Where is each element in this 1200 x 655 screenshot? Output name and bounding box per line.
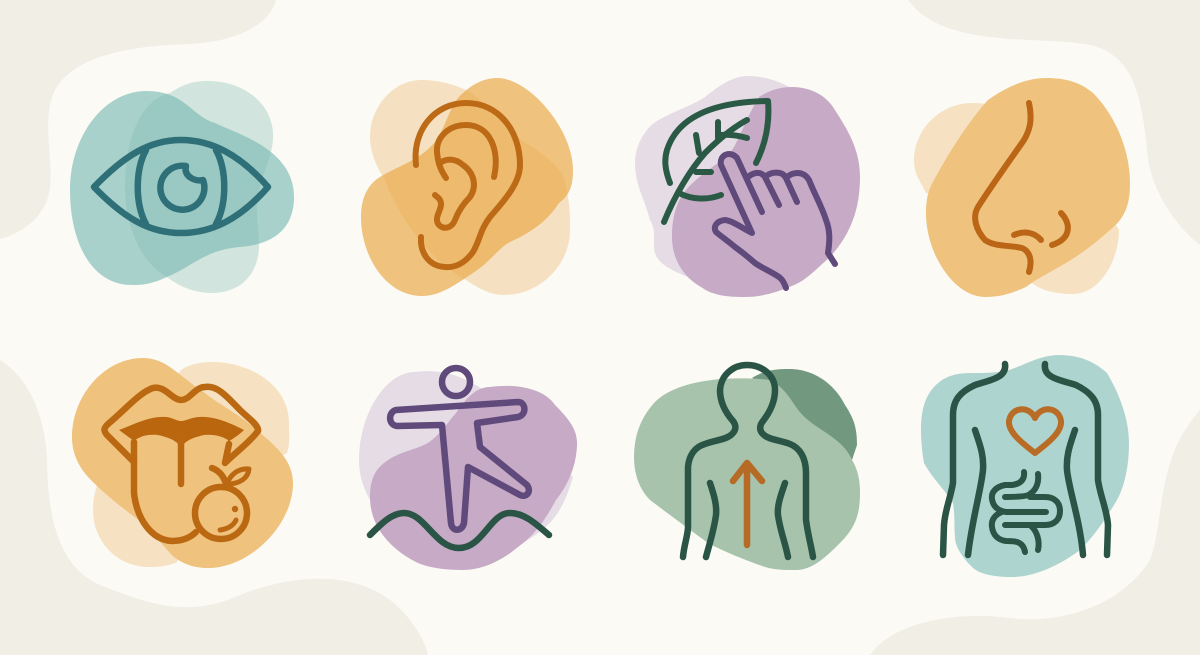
- fruit highlight: [232, 506, 238, 512]
- icon: nose: [914, 78, 1130, 297]
- icon: ear: [361, 78, 573, 296]
- icon: body with arrow: [634, 365, 860, 570]
- icon: eye: [70, 81, 294, 293]
- icon: balance figure: [359, 368, 577, 570]
- icon: torso with heart and gut: [921, 355, 1129, 577]
- icon: tongue and fruit: [72, 358, 293, 568]
- icon: leaf and hand: [635, 76, 860, 297]
